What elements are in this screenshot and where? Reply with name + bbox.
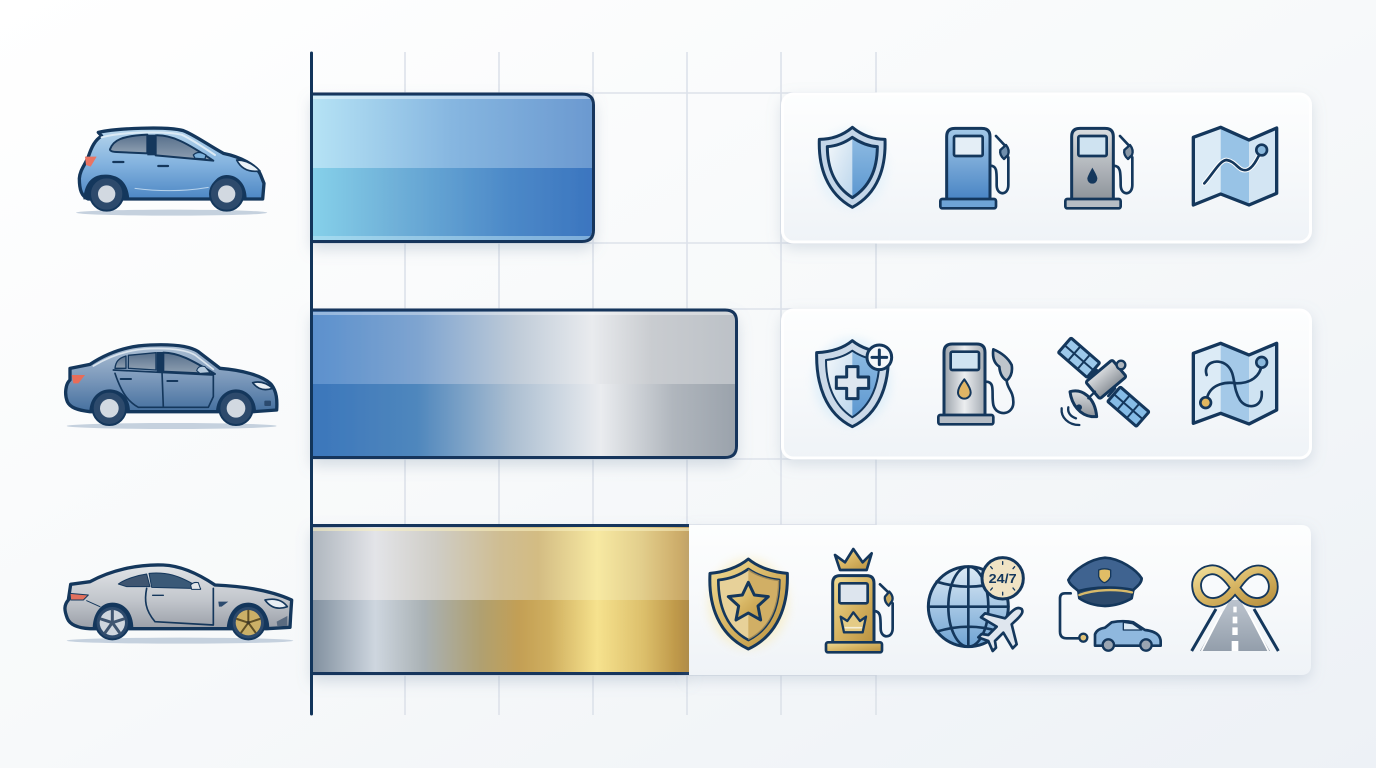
panel: tier 3 benefits: [689, 525, 1311, 675]
vertical axis: [310, 53, 313, 714]
icon: grey fuel pump: [1065, 128, 1133, 208]
icon: globe with 24/7 clock and plane: 24/7: [989, 571, 1017, 586]
icon: premium fuel pump with crown: [826, 549, 893, 652]
car: grey-blue sedan: [66, 345, 277, 429]
icon: blue fuel pump: [940, 128, 1009, 208]
car: blue hatchback: [76, 128, 267, 216]
icon: satellite: [1058, 338, 1149, 426]
panel: tier 1 benefits: [782, 94, 1310, 242]
icon: gold shield with star: [708, 558, 788, 649]
icon: silver fuel pump: [938, 344, 1013, 424]
icon: map with winding route: [1193, 343, 1277, 424]
icon: infinity road: [1192, 570, 1278, 651]
icon: globe with 24/7 clock and plane: [928, 558, 1023, 651]
icon: chauffeur hat with car: [1060, 558, 1161, 651]
bar: tier 2 blue to silver: [311, 310, 737, 458]
bar: tier 3 silver to gold: [311, 526, 689, 674]
bar: tier 1 blue: [311, 94, 594, 242]
icon: shield with plus: [814, 338, 892, 427]
chart grid: [311, 52, 876, 715]
car: silver coupe: [65, 565, 293, 644]
icon: shield: [817, 127, 887, 208]
panel: tier 2 benefits: [782, 310, 1310, 458]
icon: map with route: [1193, 127, 1277, 205]
